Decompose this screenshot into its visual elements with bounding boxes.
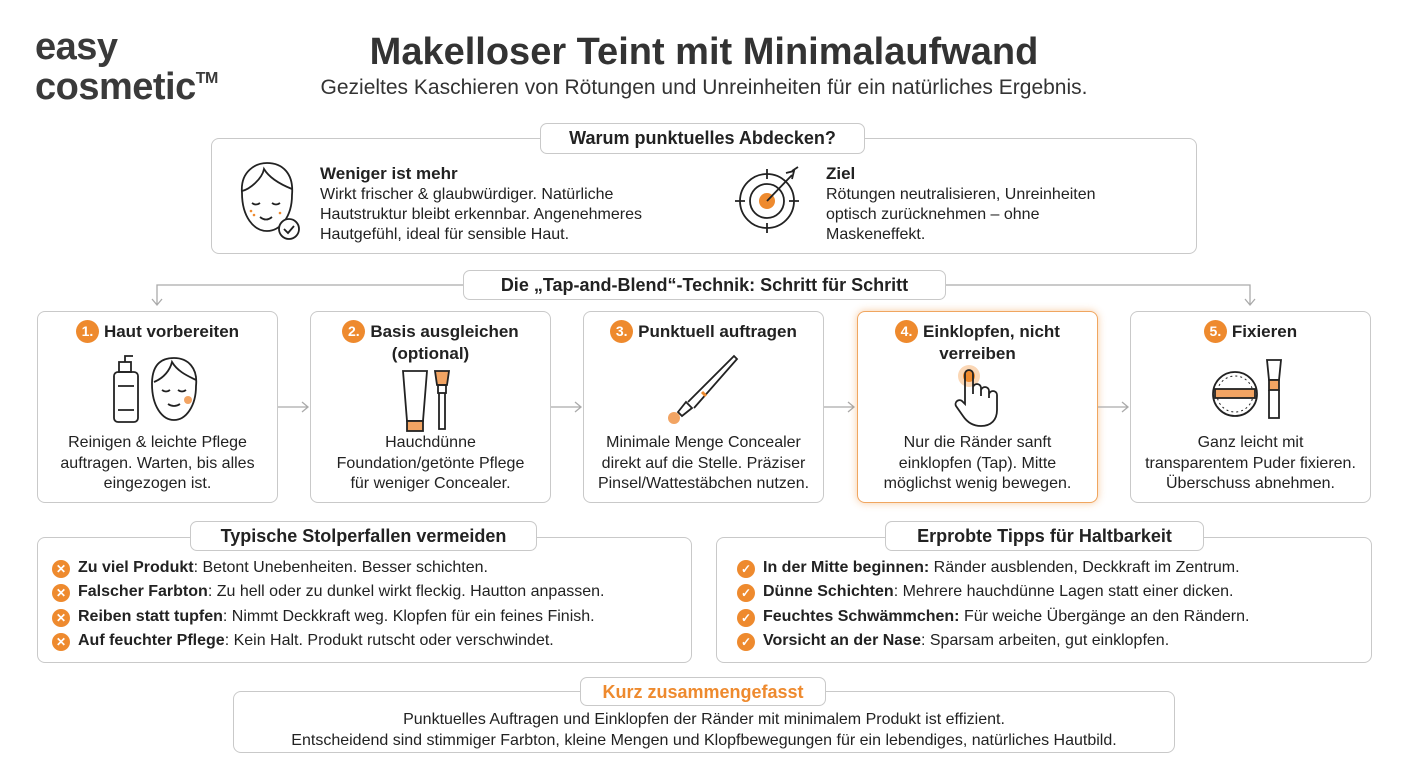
logo: cosmeticTM <box>35 66 218 108</box>
step 3: direkt auf die Stelle. Präziser <box>602 454 805 472</box>
step 1: Reinigen & leichte Pflege <box>68 434 247 451</box>
step 2: Foundation/getönte Pflege <box>337 454 524 472</box>
panel: summary <box>233 691 1175 753</box>
text: ziel: Maskeneffekt. <box>826 226 925 243</box>
step 1: Haut vorbereiten <box>104 322 239 341</box>
icon: face <box>240 162 300 240</box>
step 2: Basis ausgleichen <box>370 322 519 341</box>
step 5: transparentem Puder fixieren. <box>1145 454 1356 472</box>
step 5: 5. <box>1210 323 1221 339</box>
heading: summary: Kurz zusammengefasst <box>602 682 804 702</box>
arrow <box>824 402 855 412</box>
item 3: ✕ <box>56 611 66 625</box>
step 3: Minimale Menge Concealer <box>606 434 801 451</box>
heading: tips <box>885 521 1204 551</box>
item 4: ✕ <box>56 635 66 649</box>
step 5: Fixieren <box>1232 322 1297 341</box>
item 4: Auf feuchter Pflege: Kein Halt. Produkt rutscht oder verschwindet. <box>78 632 554 649</box>
step 4 highlighted <box>857 311 1098 503</box>
panel: pitfalls <box>37 537 692 663</box>
item 3: Reiben statt tupfen: Nimmt Deckkraft weg. Klopfen für ein feines Finish. <box>78 608 595 625</box>
step 4 highlighted: 4. <box>901 323 912 339</box>
arrow <box>551 402 582 412</box>
heading: summary <box>580 677 826 706</box>
icon: target <box>735 166 799 233</box>
step 3: Pinsel/Wattestäbchen nutzen. <box>598 475 809 492</box>
step 2 <box>310 311 551 503</box>
step 2: Hauchdünne <box>385 434 476 451</box>
arrow <box>278 402 309 412</box>
logo: easy <box>35 26 118 68</box>
text: weniger ist mehr: Weniger ist mehr <box>320 164 458 183</box>
heading: tap and blend <box>463 270 946 300</box>
heading: pitfalls: Typische Stolperfallen vermeiden <box>221 526 506 546</box>
tip 1: In der Mitte beginnen: Ränder ausblenden, Deckkraft im Zentrum. <box>763 559 1240 576</box>
heading: warum <box>540 123 865 154</box>
heading: tips: Erprobte Tipps für Haltbarkeit <box>917 526 1172 546</box>
step 1 <box>37 311 278 503</box>
tip 2: Dünne Schichten: Mehrere hauchdünne Lagen statt einer dicken. <box>763 583 1233 600</box>
step 3: 3. <box>616 323 628 339</box>
icon: bottle and face <box>113 355 198 423</box>
text: weniger ist mehr: Wirkt frischer & glaubwürdiger. Natürliche <box>320 186 613 203</box>
step 4 highlighted: Einklopfen, nicht <box>923 322 1060 341</box>
step 3 <box>583 311 824 503</box>
item 1: ✕ <box>56 562 66 576</box>
item 2: ✕ <box>56 586 66 600</box>
item 2: Falscher Farbton: Zu hell oder zu dunkel wirkt fleckig. Hautton anpassen. <box>78 583 604 600</box>
summary text: Punktuelles Auftragen und Einklopfen der Ränder mit minimalem Produkt ist effizient. <box>403 711 1005 728</box>
step 5: Ganz leicht mit <box>1198 434 1303 451</box>
step 2: für weniger Concealer. <box>350 475 511 492</box>
step 4 highlighted: möglichst wenig bewegen. <box>884 475 1071 492</box>
text: weniger ist mehr: Hautgefühl, ideal für sensible Haut. <box>320 226 569 243</box>
arrow <box>1098 402 1129 412</box>
step 4 highlighted: Nur die Ränder sanft <box>904 434 1051 451</box>
icon: powder puff and brush <box>1212 359 1282 419</box>
tip 3: ✓ <box>741 611 751 625</box>
step 1: eingezogen ist. <box>104 475 211 492</box>
connector line <box>152 284 1256 306</box>
heading: pitfalls <box>190 521 537 551</box>
icon: brush <box>668 354 738 424</box>
tip 1: ✓ <box>741 562 751 576</box>
text: ziel <box>826 164 1096 243</box>
logo <box>35 26 218 108</box>
step 1: auftragen. Warten, bis alles <box>60 454 255 472</box>
text: weniger ist mehr <box>320 164 642 243</box>
tip 2: ✓ <box>741 586 751 600</box>
icon: tapping hand <box>954 365 998 427</box>
step 5: Überschuss abnehmen. <box>1166 475 1335 492</box>
panel: warum <box>211 138 1197 254</box>
step 4 highlighted: einklopfen (Tap). Mitte <box>899 454 1056 472</box>
icon: tube and brush <box>402 370 450 432</box>
step 1: 1. <box>82 323 93 339</box>
step 2: 2. <box>348 323 360 339</box>
item 1: Zu viel Produkt: Betont Unebenheiten. Besser schichten. <box>78 559 488 576</box>
step 5 <box>1130 311 1371 503</box>
text: weniger ist mehr: Hautstruktur bleibt erkennbar. Angenehmeres <box>320 206 642 223</box>
heading: warum: Warum punktuelles Abdecken? <box>569 128 836 148</box>
title: Makelloser Teint mit Minimalaufwand <box>370 31 1038 73</box>
step 4 highlighted: verreiben <box>939 344 1016 363</box>
step 2: (optional) <box>392 344 469 363</box>
summary text <box>291 711 1117 749</box>
summary text: Entscheidend sind stimmiger Farbton, kleine Mengen und Klopfbewegungen für ein lebendiges, natürliches Hautbild. <box>291 732 1117 749</box>
heading: tap and blend: Die „Tap-and-Blend“-Technik: Schritt für Schritt <box>501 275 908 295</box>
tip 4: Vorsicht an der Nase: Sparsam arbeiten, gut einklopfen. <box>763 632 1169 649</box>
tip 3: Feuchtes Schwämmchen: Für weiche Übergänge an den Rändern. <box>763 608 1249 625</box>
text: ziel: optisch zurücknehmen – ohne <box>826 206 1039 223</box>
text: ziel: Rötungen neutralisieren, Unreinheiten <box>826 186 1096 203</box>
tip 4: ✓ <box>741 635 751 649</box>
subtitle: Gezieltes Kaschieren von Rötungen und Unreinheiten für ein natürliches Ergebnis. <box>321 76 1087 99</box>
text: ziel: Ziel <box>826 164 855 183</box>
step 3: Punktuell auftragen <box>638 322 797 341</box>
panel: tips <box>716 537 1372 663</box>
